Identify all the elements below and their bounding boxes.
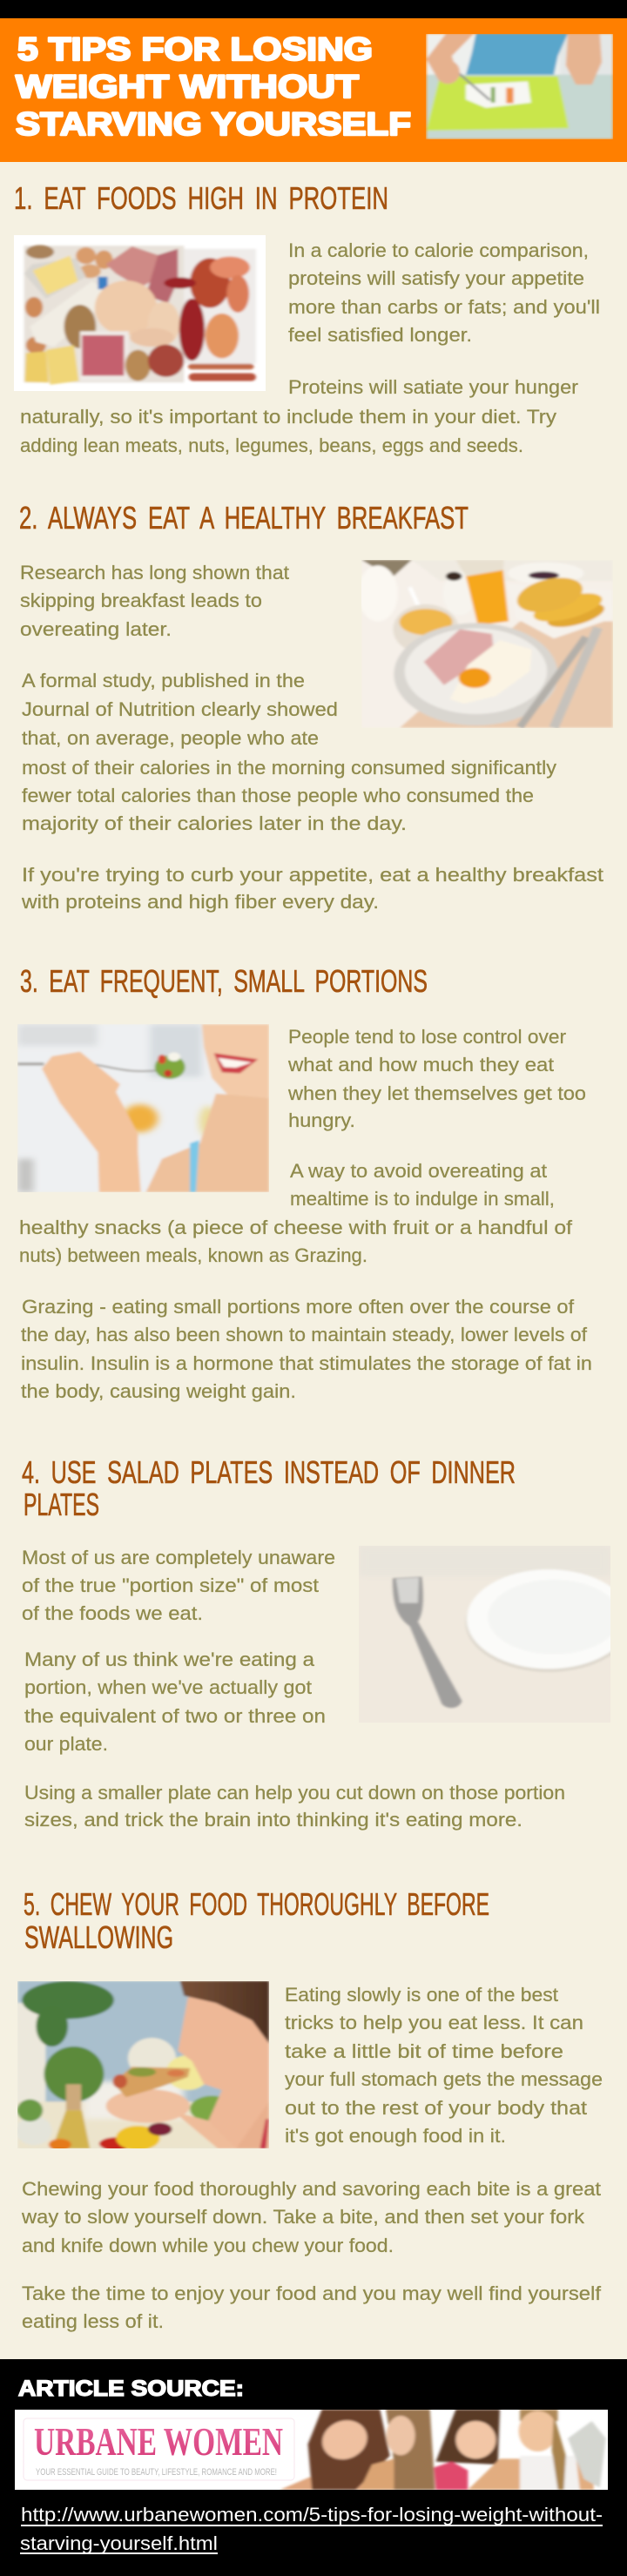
panel: tip 1 — [14, 180, 600, 456]
text block: tip 1: adding lean meats, nuts, legumes, beans, eggs and seeds. — [20, 435, 523, 456]
text block: tip 3: hungry. — [288, 1109, 355, 1131]
heading: article source: ARTICLE SOURCE: — [18, 2377, 244, 2401]
text block: tip 3: nuts) between meals, known as Grazing. — [19, 1244, 367, 1266]
text block: tip 4: Most of us are completely unaware — [22, 1547, 335, 1568]
text block: tip 3: when they let themselves get too — [287, 1082, 586, 1104]
text block: tip 4: portion, when we've actually got — [24, 1676, 312, 1698]
text block: tip 2: most of their calories in the morning consumed significantly — [22, 757, 556, 779]
text block: tip 1: feel satisfied longer. — [288, 324, 472, 346]
title: STARVING YOURSELF — [16, 106, 411, 142]
heading: tip 4: PLATES — [24, 1487, 99, 1522]
banner: Urbane Women — [15, 2410, 608, 2490]
text block: tip 5: way to slow yourself down. Take a bite, and then set your fork — [21, 2206, 585, 2228]
text block: tip 2: with proteins and high fiber every day. — [21, 891, 379, 913]
text block: tip 2: Research has long shown that — [20, 562, 289, 583]
text block: tip 5: Chewing your food thoroughly and savoring each bite is a great — [22, 2178, 601, 2200]
heading: tip 1: 1. EAT FOODS HIGH IN PROTEIN — [14, 180, 388, 216]
image: woman eating pizza — [16, 1981, 269, 2150]
text block: tip 5: eating less of it. — [22, 2310, 164, 2332]
heading: tip 3: 3. EAT FREQUENT, SMALL PORTIONS — [20, 963, 428, 999]
text block: tip 1: naturally, so it's important to include them in your diet. Try — [20, 406, 556, 428]
text block: tip 2: that, on average, people who ate — [22, 727, 319, 749]
image: woman eating salad from a fork — [17, 1024, 269, 1192]
text block: tip 4: Using a smaller plate can help you cut down on those portion — [24, 1782, 565, 1804]
text block: tip 3: insulin. Insulin is a hormone that stimulates the storage of fat in — [21, 1352, 592, 1374]
text block: tip 2: majority of their calories later in the day. — [22, 813, 407, 834]
image: four smiling women — [280, 2410, 606, 2490]
panel: tip 5 — [16, 1886, 603, 2332]
text block: tip 2: Journal of Nutrition clearly showed — [22, 698, 338, 720]
link: article url — [20, 2504, 603, 2554]
text block: tip 1: In a calorie to calorie comparison, — [288, 239, 589, 261]
title — [16, 31, 411, 142]
text block: tip 5: your full stomach gets the message — [285, 2068, 603, 2090]
text block: tip 3: Grazing - eating small portions more often over the course of — [22, 1296, 575, 1318]
heading: tip 4 — [22, 1454, 516, 1522]
text block: tip 2: overeating later. — [20, 618, 172, 640]
text block: tip 3: People tend to lose control over — [288, 1026, 566, 1048]
banner: Urbane Women: URBANE WOMEN — [34, 2419, 283, 2464]
text block: tip 3: A way to avoid overeating at — [290, 1160, 547, 1182]
text block: tip 4: Many of us think we're eating a — [24, 1649, 315, 1670]
panel: tip 2 — [19, 500, 613, 913]
banner: Urbane Women: YOUR ESSENTIAL GUIDE TO BEAUTY, LIFESTYLE, ROMANCE AND MORE! — [36, 2467, 277, 2478]
text block: tip 5: and knife down while you chew your food. — [22, 2235, 394, 2256]
panel: article source footer — [0, 2359, 627, 2576]
text block: tip 5 — [21, 1984, 603, 2332]
image: woman with tiny meal on a green placemat — [427, 34, 613, 139]
heading: tip 5 — [24, 1886, 489, 1955]
text block: tip 5: out to the rest of your body that — [285, 2097, 587, 2119]
text block: tip 1: Proteins will satiate your hunger — [288, 376, 578, 398]
text block: tip 5: it's got enough food in it. — [285, 2125, 506, 2147]
text block: tip 4: sizes, and trick the brain into thinking it's eating more. — [24, 1809, 522, 1831]
image: healthy breakfast plate — [358, 560, 613, 728]
image: fork and small plate — [359, 1546, 610, 1710]
text block: tip 2: A formal study, published in the — [22, 670, 305, 691]
text block: tip 4: the equivalent of two or three on — [24, 1705, 326, 1727]
text block: tip 4: of the true "portion size" of most — [22, 1575, 319, 1596]
text block: tip 2: skipping breakfast leads to — [20, 590, 262, 611]
text block: tip 3: healthy snacks (a piece of cheese with fruit or a handful of — [19, 1217, 573, 1238]
text block: tip 4 — [22, 1547, 565, 1831]
header band — [0, 0, 627, 162]
text block: tip 5: Eating slowly is one of the best — [285, 1984, 558, 2006]
text block: tip 3 — [19, 1026, 592, 1402]
text block: tip 3: the day, has also been shown to maintain steady, lower levels of — [21, 1324, 588, 1345]
title: 5 TIPS FOR LOSING — [17, 31, 373, 67]
link: article url: http://www.urbanewomen.com/5-tips-for-losing-weight-without- — [21, 2504, 603, 2525]
text block: tip 2 — [20, 562, 603, 913]
heading: tip 5: SWALLOWING — [24, 1919, 173, 1955]
text block: tip 4: our plate. — [24, 1733, 108, 1755]
text block: tip 1: more than carbs or fats; and you'll — [288, 296, 600, 318]
text block: tip 3: the body, causing weight gain. — [21, 1380, 296, 1402]
image: protein foods — [14, 235, 266, 391]
text block: tip 4: of the foods we eat. — [22, 1602, 203, 1624]
text block: tip 1 — [20, 239, 600, 456]
text block: tip 2: If you're trying to curb your appetite, eat a healthy breakfast — [22, 864, 603, 886]
link: article url: starving-yourself.html — [20, 2532, 218, 2554]
title: WEIGHT WITHOUT — [16, 69, 359, 105]
text block: tip 5: take a little bit of time before — [285, 2040, 563, 2062]
panel: tip 3 — [17, 963, 592, 1402]
text block: tip 3: mealtime is to indulge in small, — [290, 1188, 555, 1210]
text block: tip 2: fewer total calories than those people who consumed the — [22, 785, 534, 806]
text block: tip 1: proteins will satisfy your appetite — [288, 267, 584, 289]
panel: tip 4 — [22, 1454, 627, 1831]
text block: tip 5: Take the time to enjoy your food and you may well find yourself — [22, 2283, 602, 2304]
text block: tip 3: what and how much they eat — [287, 1054, 554, 1076]
text block: tip 5: tricks to help you eat less. It can — [285, 2012, 583, 2033]
